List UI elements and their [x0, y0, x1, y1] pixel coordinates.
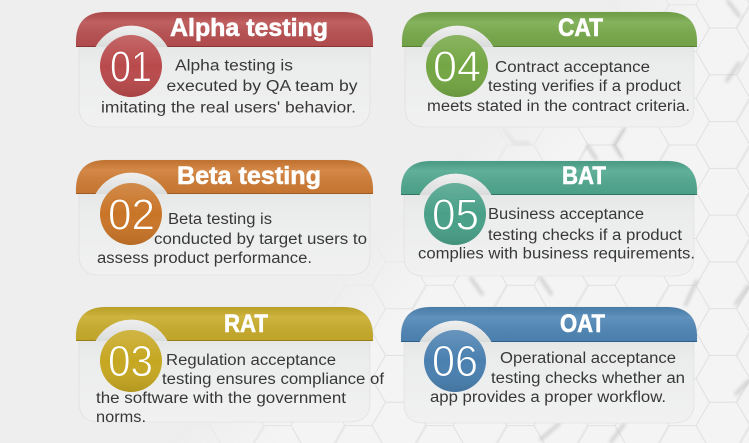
hexagon pattern: [262, 0, 749, 443]
description: app provides a proper workflow.: [430, 389, 666, 406]
description: the software with the government: [96, 390, 347, 407]
description: [418, 206, 695, 262]
heading: RAT: [224, 310, 268, 338]
number badge: 02: [108, 190, 155, 240]
panel: Beta testing: [76, 160, 373, 275]
description: [96, 352, 385, 426]
panel: BAT: [401, 161, 697, 276]
number ring: [420, 321, 492, 342]
description: testing verifies if a product: [488, 78, 682, 95]
number badge: 04: [433, 42, 481, 92]
description: Contract acceptance: [495, 59, 650, 76]
number ring: [420, 174, 492, 195]
description: Regulation acceptance: [166, 352, 336, 369]
panel: OAT: [401, 307, 697, 423]
heading: BAT: [562, 162, 606, 190]
description: Alpha testing is: [175, 58, 293, 74]
heading: OAT: [560, 310, 605, 338]
number badge: [426, 35, 488, 97]
description: [97, 211, 367, 267]
panel: Alpha testing: [76, 12, 373, 127]
description: testing ensures compliance of: [162, 371, 385, 388]
description: meets stated in the contract criteria.: [427, 98, 690, 115]
number ring: [96, 320, 168, 341]
number badge: [100, 330, 162, 392]
header bar: [76, 307, 373, 340]
number badge: [424, 183, 486, 245]
panel: RAT: [76, 307, 385, 426]
number badge: 03: [108, 337, 153, 386]
description: norms.: [96, 409, 146, 426]
number badge: 05: [432, 190, 479, 240]
description: [101, 58, 358, 116]
description: testing checks if a product: [488, 227, 683, 244]
number badge: 01: [110, 42, 152, 92]
description: [427, 59, 690, 115]
description: executed by QA team by: [166, 78, 358, 95]
number ring: [96, 26, 168, 47]
description: testing checks whether an: [491, 370, 685, 387]
description: [430, 350, 685, 406]
description: imitating the real users' behavior.: [101, 100, 356, 116]
description: Operational acceptance: [500, 350, 676, 367]
heading: Beta testing: [177, 162, 321, 190]
number badge: [100, 183, 162, 245]
description: complies with business requirements.: [418, 246, 695, 262]
description: conducted by target users to: [154, 231, 367, 248]
heading: Alpha testing: [170, 14, 328, 42]
number ring: [96, 173, 168, 194]
description: Beta testing is: [168, 211, 272, 228]
number badge: [100, 35, 162, 97]
header bar: [401, 161, 697, 194]
header bar: [76, 160, 373, 194]
header bar: [402, 12, 697, 46]
heading: CAT: [558, 14, 603, 42]
header bar: [76, 12, 373, 46]
description: assess product performance.: [97, 250, 312, 267]
number badge: [424, 330, 486, 392]
number ring: [422, 26, 494, 47]
description: Business acceptance: [488, 206, 644, 223]
panel: CAT: [402, 12, 697, 127]
number badge: 06: [432, 337, 478, 386]
header bar: [401, 307, 697, 342]
